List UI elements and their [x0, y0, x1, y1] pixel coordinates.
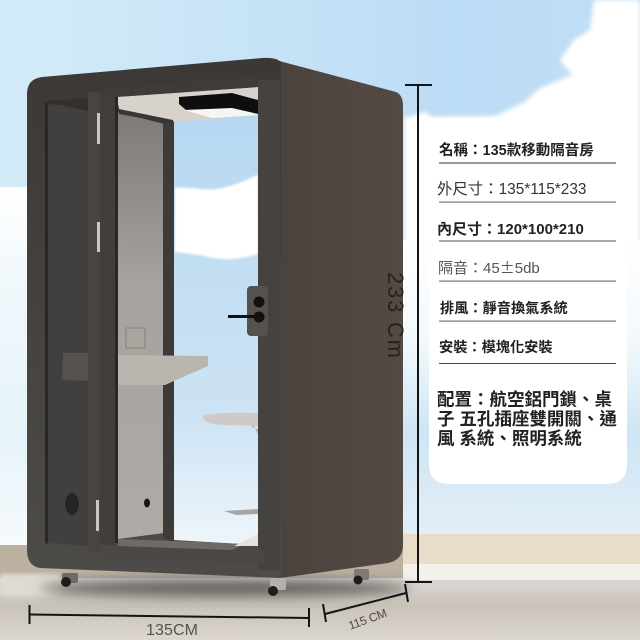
spec: configuration: 配置：航空鋁門鎖、桌 [437, 386, 612, 412]
depth dimension line [323, 584, 408, 622]
caster left [61, 573, 78, 587]
door jamb left [88, 92, 100, 552]
left upper bracket [47, 98, 88, 111]
panel background [429, 118, 627, 484]
casters [61, 569, 369, 596]
chair base through doorway [234, 534, 258, 546]
spec: outer size: 外尺寸：135*115*233 [437, 177, 586, 199]
pale strip left [0, 574, 60, 596]
stool seat [203, 413, 258, 434]
width dimension line [30, 605, 309, 627]
wall skirting right [403, 534, 640, 564]
spec: installation: 安裝：模塊化安裝 [439, 337, 553, 357]
booth side wall [268, 58, 403, 578]
right felt panel [118, 112, 164, 539]
inner top beam [119, 109, 173, 124]
stool foot [224, 509, 258, 515]
threshold [118, 539, 245, 550]
height dimension line [405, 85, 432, 582]
hinges [96, 113, 100, 531]
left felt shadow edge [45, 102, 48, 544]
width dimension [30, 605, 309, 639]
floor base [0, 578, 640, 640]
door top rail [100, 77, 258, 97]
soundproof booth [27, 58, 403, 578]
door bottom rail [100, 545, 268, 563]
depth dimension [323, 584, 408, 633]
door handle [228, 286, 268, 336]
wall skirting left [0, 545, 403, 578]
door stile [100, 87, 115, 552]
caster right [354, 569, 369, 584]
door stile shadow [115, 97, 118, 543]
desk [62, 353, 208, 385]
spec: configuration: 風 系統、照明系統 [437, 428, 582, 448]
width label: 135CM [146, 622, 198, 639]
spec: sound insulation: 隔音：45±5db [438, 257, 540, 278]
depth label: 115 CM [346, 606, 389, 633]
ceiling light [179, 93, 258, 118]
spec: ventilation: 排風：靜音換氣系統 [440, 298, 568, 318]
booth front frame [27, 58, 281, 578]
view through doorway [174, 113, 258, 545]
caster middle [268, 578, 286, 596]
left felt panel [47, 99, 88, 546]
pale floor edge [403, 564, 640, 580]
spec panel [429, 118, 627, 484]
spec: name: 名稱：135款移動隔音房 [439, 139, 594, 160]
height label: 233 Cm [383, 272, 408, 358]
spec: configuration: 子 五孔插座雙開關、通 [437, 409, 617, 429]
right door frame post [258, 80, 280, 570]
floor [0, 534, 640, 640]
wall socket [126, 328, 145, 348]
spec: inner size: 內尺寸：120*100*210 [437, 218, 584, 239]
spec: configuration [437, 386, 617, 448]
cloud seen through doorway [175, 175, 258, 259]
speaker grille [65, 493, 79, 515]
floor shadow under booth [40, 579, 410, 597]
ceiling panel [116, 87, 258, 122]
felt hole [144, 498, 150, 508]
inner column [163, 122, 174, 542]
